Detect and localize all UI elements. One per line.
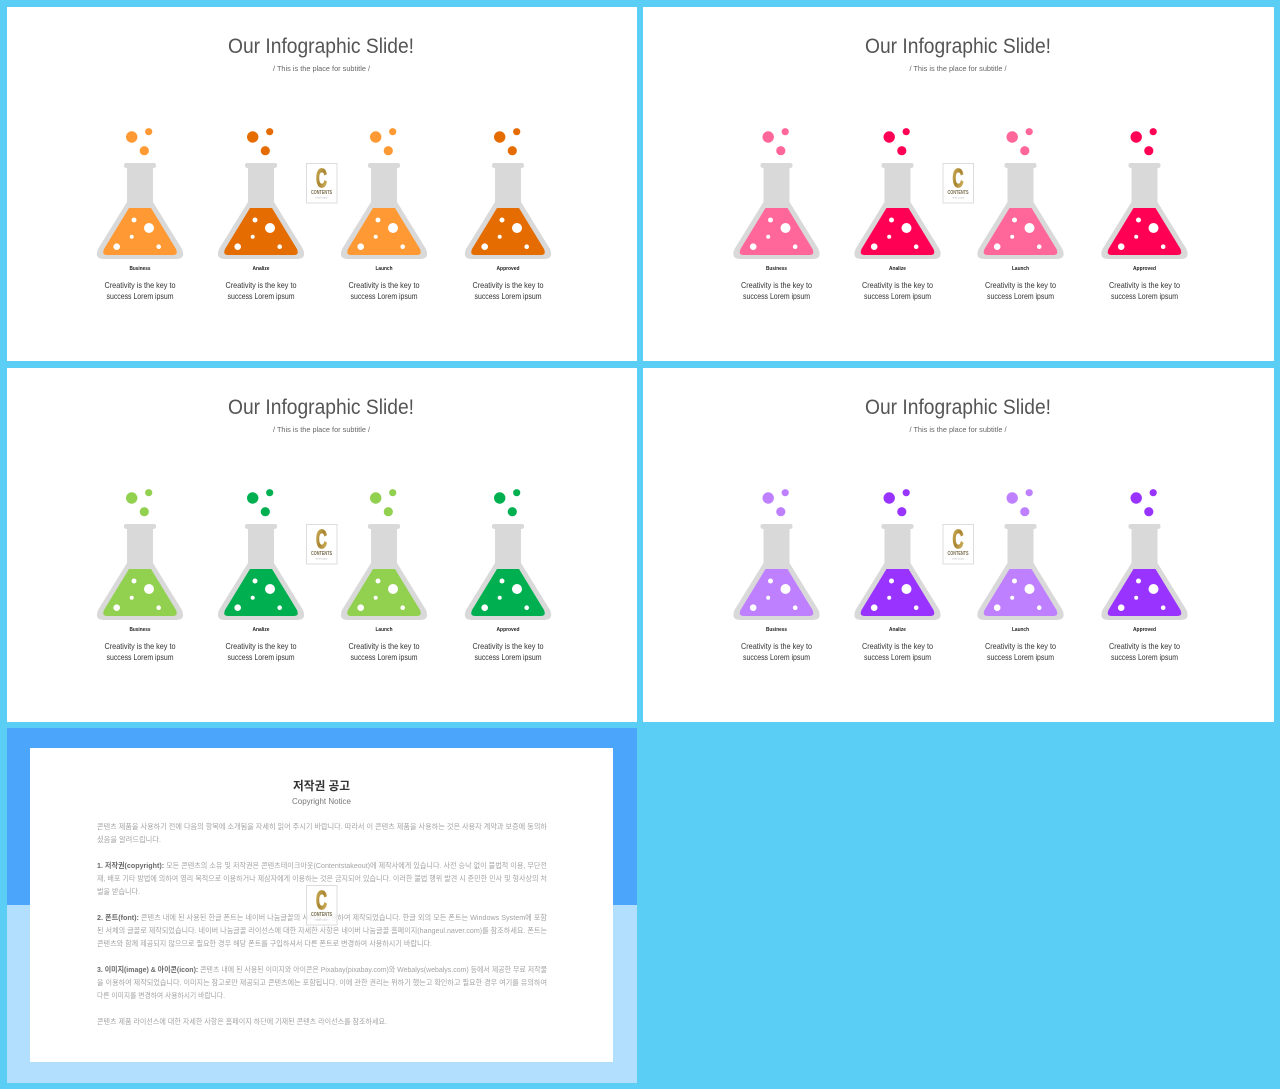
flask: Launch: Creativity is the key to	[985, 642, 1056, 651]
text block: notice body: 1. 저작권(copyright): 모든 콘텐츠의 소유 및 저작권은 콘텐츠테이크아웃(Contentstakeout)에 제작사에게 있습니다. 사전 승낙 없이 불법적 이용, 무단전	[97, 860, 547, 870]
flask: Analize	[854, 128, 941, 301]
subtitle: / This is the place for subtitle /	[273, 64, 371, 73]
flask: Launch	[977, 489, 1064, 662]
text block: notice body: 2. 폰트(font): 콘텐츠 내에 된 사용된 한글 폰트는 네이버 나눔글꼴의 서체를 사용하여 제작되었습니다. 한글 외의 모든 폰트는 Windows System에 포함	[97, 912, 547, 922]
subtitle: / This is the place for subtitle /	[273, 425, 371, 434]
panel: orange slide	[7, 7, 637, 361]
flask: Business	[97, 489, 183, 662]
flask: Business: success Lorem ipsum	[743, 292, 810, 301]
icon: contents badge: CONTENTS	[311, 551, 333, 557]
flask: Approved: Approved	[496, 627, 520, 633]
flask: Business: success Lorem ipsum	[106, 292, 174, 301]
flask: Analize: Analize	[252, 627, 270, 633]
flask: Approved: success Lorem ipsum	[474, 653, 542, 662]
flask: Business: Business	[130, 627, 150, 633]
flask: Business: success Lorem ipsum	[106, 653, 174, 662]
flask: Approved	[465, 128, 551, 301]
flask: Launch: Launch	[1012, 627, 1030, 633]
heading: Our Infographic Slide!	[228, 35, 414, 58]
flask: Approved: success Lorem ipsum	[1111, 292, 1178, 301]
flask: Approved: success Lorem ipsum	[474, 292, 542, 301]
flask: Analize: Analize	[252, 266, 270, 272]
flask: Launch: success Lorem ipsum	[350, 292, 418, 301]
icon: contents badge: C	[952, 524, 964, 554]
subheading: copyright notice: Copyright Notice	[292, 796, 351, 806]
flask: Business	[733, 489, 820, 662]
text block: notice body: 된 서체의 글꼴로 제작되었습니다. 네이버 나눔글꼴 라이선스에 대한 자세한 사항은 네이버 나눔글꼴 홈페이지(hangeul.naver.com)를 참조하세요. 폰트는	[97, 925, 547, 935]
flask: Approved	[465, 489, 551, 662]
icon: contents badge: CONTENTS	[311, 190, 333, 196]
flask: Analize: Creativity is the key to	[226, 281, 297, 290]
flask: Approved: Creativity is the key to	[472, 281, 544, 290]
icon: contents badge: CONTENTS	[948, 551, 969, 557]
icon: contents badge: real copy	[952, 196, 965, 200]
flask: Analize: success Lorem ipsum	[228, 292, 295, 301]
icon: contents badge	[306, 163, 337, 203]
flask: Business: Creativity is the key to	[741, 642, 812, 651]
flask: Business: Creativity is the key to	[741, 281, 812, 290]
flask: Launch: success Lorem ipsum	[987, 292, 1054, 301]
icon: contents badge: C	[316, 524, 327, 554]
panel: green slide	[7, 368, 637, 722]
flask: Launch: success Lorem ipsum	[350, 653, 418, 662]
flask: Approved: success Lorem ipsum	[1111, 653, 1178, 662]
text block: notice body: 콘텐츠 제품을 사용하기 전에 다음의 항목에 소개됨을 자세히 읽어 주시기 바랍니다. 따라서 이 콘텐츠 제품을 사용하는 것은 사용자 계약과 보증에 동의하	[97, 821, 547, 831]
flask: Analize: success Lorem ipsum	[228, 653, 295, 662]
panel: copyright notice slide	[7, 728, 637, 1083]
flask: Analize: success Lorem ipsum	[864, 292, 931, 301]
flask: Analize: Creativity is the key to	[862, 281, 933, 290]
flask: Launch	[977, 128, 1064, 301]
icon: contents badge: real copy	[315, 196, 328, 200]
text block: notice body: 셨음을 알려드립니다.	[97, 834, 161, 844]
flask: Approved: Creativity is the key to	[472, 642, 544, 651]
flask: Launch: Creativity is the key to	[985, 281, 1056, 290]
panel: purple slide	[643, 368, 1274, 722]
flask: Approved: Approved	[1133, 627, 1156, 633]
subtitle: / This is the place for subtitle /	[910, 64, 1007, 73]
flask: Analize	[854, 489, 941, 662]
flask: Analize: success Lorem ipsum	[864, 653, 931, 662]
icon: contents badge: real copy	[952, 556, 965, 560]
flask: Analize	[218, 489, 304, 662]
flask: Business: Creativity is the key to	[104, 281, 176, 290]
flask: Analize	[218, 128, 304, 301]
icon: contents badge	[306, 524, 337, 564]
icon: contents badge: C	[952, 163, 964, 193]
flask: Approved: Approved	[496, 266, 520, 272]
flask: Analize: Analize	[889, 627, 906, 633]
flask: Analize: Analize	[889, 266, 906, 272]
icon: contents badge: CONTENTS	[948, 190, 969, 196]
flask: Business: Business	[766, 266, 787, 272]
icon: contents badge	[943, 524, 974, 564]
flask: Launch: Launch	[1012, 266, 1030, 272]
flask: Approved: Approved	[1133, 266, 1156, 272]
icon: contents badge	[306, 885, 337, 925]
text block: notice body: 콘텐츠 제품 라이선스에 대한 자세한 사항은 홈페이지 하단에 기재된 콘텐츠 라이선스를 참조하세요.	[97, 1016, 387, 1026]
flask: Launch	[341, 128, 427, 301]
icon: contents badge: C	[316, 163, 327, 193]
subtitle: / This is the place for subtitle /	[910, 425, 1007, 434]
text block: notice body: 콘텐츠와 함께 제공되지 않으므로 필요한 경우 해당 폰트를 구입하셔서 다른 폰트로 변경하여 사용하시기 바랍니다.	[97, 938, 432, 948]
flask: Approved	[1101, 128, 1188, 301]
flask: Business: Creativity is the key to	[104, 642, 176, 651]
text block: notice body: 재, 배포 기타 방법에 의하여 영리 목적으로 이용하거나 제삼자에게 이용하는 것은 금지되어 있습니다. 이러한 불법 행위 발견 시 준민한 민사 및 형사상의 처	[97, 873, 547, 883]
icon: contents badge: real copy	[315, 556, 328, 560]
flask: Launch	[341, 489, 427, 662]
heading: Our Infographic Slide!	[865, 396, 1051, 419]
flask: Approved: Creativity is the key to	[1109, 642, 1180, 651]
text block: notice body: 벌을 받습니다.	[97, 886, 140, 896]
text block: notice body: 을 이용하여 제작되었습니다. 이미지는 참고로만 제공되고 콘텐츠에는 포함됩니다. 이에 관한 권리는 위하기 했는고 확인하고 필요한 경우 여기를 유의하여	[97, 977, 547, 987]
icon: contents badge: real copy	[315, 918, 328, 922]
panel: pink slide	[643, 7, 1274, 361]
icon: contents badge	[943, 163, 974, 203]
flask: Launch: Launch	[376, 266, 393, 272]
flask: Launch: Creativity is the key to	[348, 642, 420, 651]
flask: Launch: Launch	[376, 627, 393, 633]
heading: Our Infographic Slide!	[228, 396, 414, 419]
text block: notice body: 다른 이미지를 변경하여 사용하시기 바랍니다.	[97, 990, 225, 1000]
flask: Launch: success Lorem ipsum	[987, 653, 1054, 662]
text block: notice body: 3. 이미지(image) & 아이콘(icon): 콘텐츠 내에 된 사용된 이미지와 아이콘은 Pixabay(pixabay.com)와 Webalys(webalys.com) 등에서 제공한 무료 저작물	[97, 964, 547, 974]
flask: Approved	[1101, 489, 1188, 662]
flask: Business: success Lorem ipsum	[743, 653, 810, 662]
flask: Launch: Creativity is the key to	[348, 281, 420, 290]
flask: Business	[733, 128, 820, 301]
flask: Business: Business	[130, 266, 150, 272]
flask: Analize: Creativity is the key to	[226, 642, 297, 651]
flask: Business	[97, 128, 183, 301]
heading: Our Infographic Slide!	[865, 35, 1051, 58]
icon: contents badge: C	[316, 885, 327, 915]
flask: Approved: Creativity is the key to	[1109, 281, 1180, 290]
flask: Business: Business	[766, 627, 787, 633]
text block: notice body	[97, 821, 547, 1026]
heading: copyright: 저작권 공고	[293, 778, 350, 793]
flask: Analize: Creativity is the key to	[862, 642, 933, 651]
icon: contents badge: CONTENTS	[311, 912, 333, 918]
